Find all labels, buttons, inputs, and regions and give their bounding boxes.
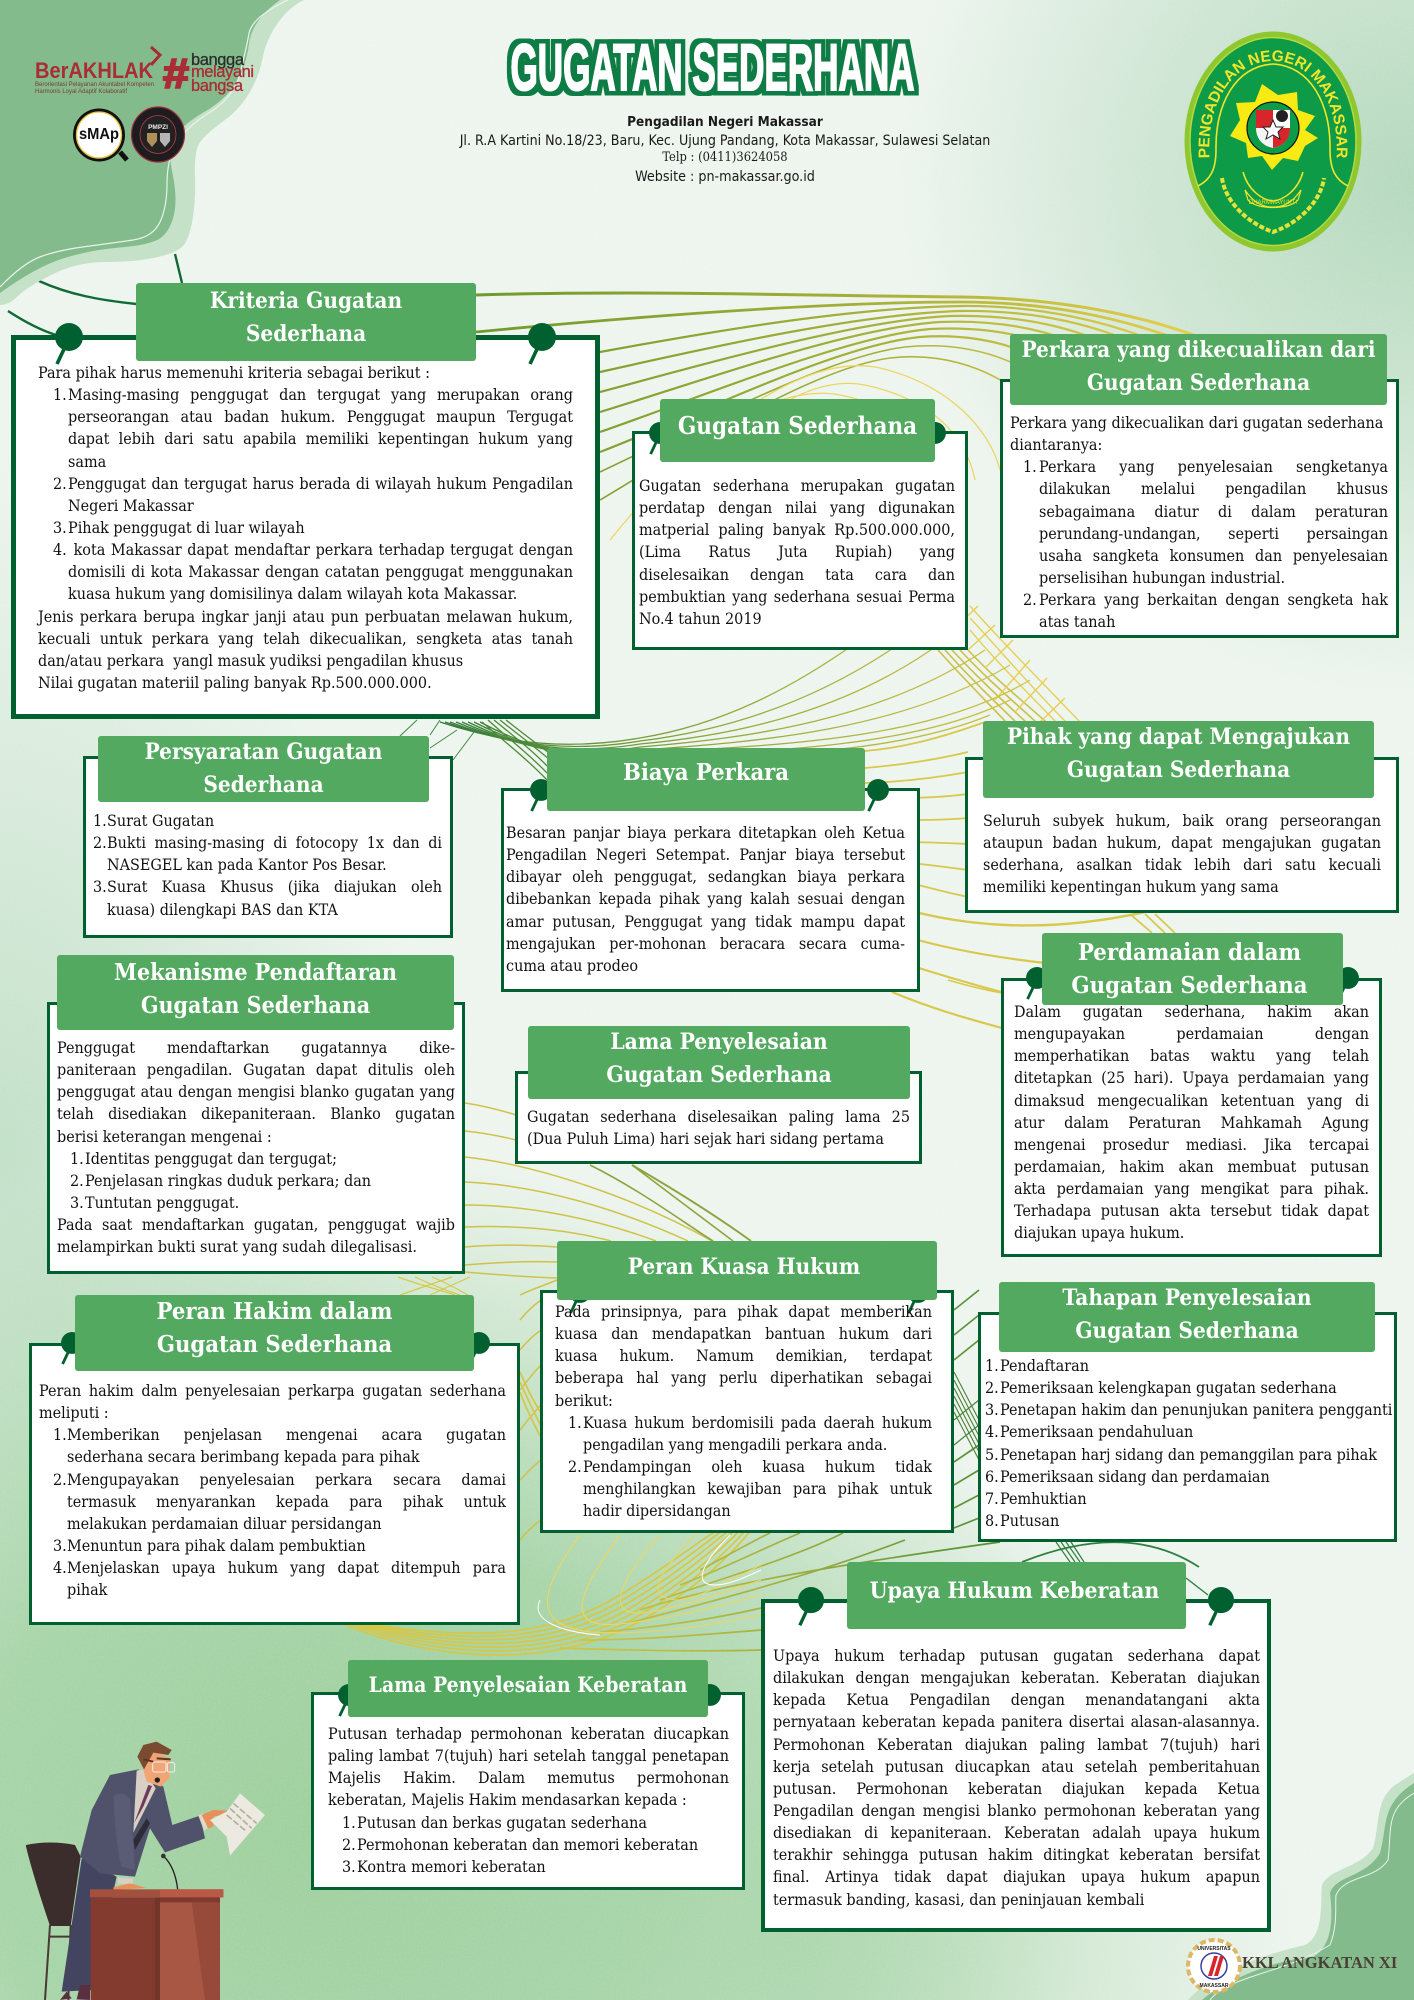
text: pengadilan yang mengadili perkara anda. xyxy=(583,1435,887,1454)
emblem: Pengadilan Negeri Makassar xyxy=(1184,32,1362,252)
panel: Persyaratan Gugatan Sederhana xyxy=(83,736,453,938)
text: dilakukan melalui pengadilan khusus xyxy=(1039,479,1388,498)
text: ataupun badan hukum, dapat mengajukan gugatan xyxy=(983,833,1381,852)
text: Pendaftaran xyxy=(1000,1356,1089,1375)
text: dilakukan dengan mengajukan keberatan. Keberatan diajukan xyxy=(773,1668,1260,1687)
text: 2. xyxy=(568,1457,582,1476)
heading: Kriteria Gugatan xyxy=(210,288,402,314)
text: dapat lebih dari satu apabila memiliki kepentingan hukum yang xyxy=(68,429,573,448)
heading xyxy=(983,721,1374,798)
text: paniteraan pengadilan. Gugatan dapat ditulis oleh xyxy=(57,1060,455,1079)
corner decoration top-left xyxy=(0,0,304,305)
text: termasuk banding, kasasi, dan peninjauan kembali xyxy=(773,1890,1144,1909)
logo: BerAKHLAK bangga melayani bangsa: Harmonis Loyal Adaptif Kolaboratif xyxy=(35,89,127,95)
panel: Biaya Perkara xyxy=(501,748,920,992)
heading xyxy=(136,283,476,361)
heading: Gugatan Sederhana xyxy=(1067,757,1290,783)
text: Kontra memori keberatan xyxy=(357,1857,546,1876)
panel: Perdamaian dalam Gugatan Sederhana xyxy=(1001,933,1382,1257)
label: KKL Angkatan XI: KKL ANGKATAN XI xyxy=(1242,1953,1397,1972)
text: Memberikan penjelasan mengenai acara gugatan xyxy=(67,1425,506,1444)
text: Pemeriksaan sidang dan perdamaian xyxy=(1000,1467,1270,1486)
text: Negeri Makassar xyxy=(68,496,194,515)
text: 2. xyxy=(53,1470,67,1489)
nested lower arcs xyxy=(548,1530,761,1633)
pin right xyxy=(935,422,946,444)
text: 7. xyxy=(985,1489,999,1508)
logo: BerAKHLAK bangga melayani bangsa: bangga xyxy=(191,51,245,69)
corner decoration bottom-right xyxy=(1188,1773,1414,2000)
text: (Dua Puluh Lima) hari sejak hari sidang pertama xyxy=(527,1129,884,1148)
text: NASEGEL kan pada Kantor Pos Besar. xyxy=(107,855,387,874)
text: Peran hakim dalm penyelesaian perkarpa gugatan sederhana xyxy=(39,1381,506,1400)
heading xyxy=(1010,334,1387,405)
panel: Peran Hakim xyxy=(29,1295,520,1625)
text: Pemeriksaan kelengkapan gugatan sederhana xyxy=(1000,1378,1337,1397)
text: paling lambat 7(tujuh) hari setelah tanggal penetapan xyxy=(328,1746,729,1765)
text xyxy=(506,823,905,975)
pin left xyxy=(570,1300,588,1314)
text: 2. xyxy=(53,474,67,493)
text: diantaranya: xyxy=(1010,435,1102,454)
text: 4. xyxy=(53,1558,67,1577)
text: memperhatikan batas waktu yang telah xyxy=(1014,1046,1369,1065)
text: Bukti masing-masing di fotocopy 1x dan di xyxy=(107,833,442,852)
text: Dalam gugatan sederhana, hakim akan xyxy=(1014,1002,1369,1021)
text: Perkara yang dikecualikan dari gugatan sederhana xyxy=(1010,413,1383,432)
text: 2. xyxy=(70,1171,84,1190)
text xyxy=(328,1723,729,1878)
logo: Universitas Dipa Makassar xyxy=(1186,1938,1242,1994)
text: 3. xyxy=(53,1536,67,1555)
text: sederhana secara berimbang kepada para pihak xyxy=(67,1447,420,1466)
text: meliputi : xyxy=(39,1403,109,1422)
text: penggugat atau dengan mengisi blanko gugatan yang xyxy=(57,1082,455,1101)
heading: Pihak yang dapat Mengajukan xyxy=(1007,724,1350,750)
text: 1. xyxy=(568,1413,582,1432)
text: 1. xyxy=(1023,457,1037,476)
text: Pemeriksaan pendahuluan xyxy=(1000,1422,1193,1441)
text: kota Makassar dapat mendaftar perkara terhadap tergugat dengan xyxy=(74,540,573,559)
text: pembuktian yang sederhana sesuai Perma xyxy=(639,587,955,606)
heading: Gugatan Sederhana xyxy=(141,992,370,1019)
text: pihak xyxy=(67,1580,107,1599)
text: Penjelasan ringkas duduk perkara; dan xyxy=(85,1171,371,1190)
text: matperial paling banyak Rp.500.000.000, xyxy=(639,520,955,539)
text: dimaksud mengecualikan ketentuan yang di xyxy=(1014,1091,1369,1110)
text: keberatan, Majelis Hakim mendasarkan kepada : xyxy=(328,1790,687,1809)
main lower ribbon xyxy=(345,1372,755,1655)
heading: Tahapan Penyelesaian xyxy=(1062,1285,1312,1311)
text: Menuntun para pihak dalam pembuktian xyxy=(67,1536,366,1555)
text: akta perdamaian yang mengikat para pihak. xyxy=(1014,1179,1369,1198)
text: Pada saat mendaftarkan gugatan, penggugat wajib xyxy=(57,1215,455,1234)
text: telah disediakan dikepaniteraan. Blanko gugatan xyxy=(57,1104,455,1123)
wide fan from pinch xyxy=(440,640,1030,760)
heading: Perkara yang dikecualikan dari xyxy=(1021,337,1376,363)
text: Jenis perkara berupa ingkar janji atau pun perbuatan melawan hukum, xyxy=(38,607,573,626)
text: mengenai prosedur mediasi. Jika tercapai xyxy=(1014,1135,1369,1154)
heading: Sederhana xyxy=(203,772,324,798)
text: Masing-masing penggugat dan tergugat yang merupakan orang xyxy=(68,385,573,404)
heading xyxy=(98,736,429,802)
heading: Lama Penyelesaian xyxy=(610,1029,828,1055)
logo: BerAKHLAK bangga melayani bangsa: melayani xyxy=(191,63,254,81)
text: putusan. Permohonan keberatan diajukan kepada Ketua xyxy=(773,1779,1260,1798)
text: kuasa dan mendapatkan bantuan hukum dari xyxy=(555,1324,932,1343)
panel: Upaya Hukum Keberatan xyxy=(761,1562,1271,1932)
panel: Lama Penyelesaian Keberatan xyxy=(311,1660,745,1890)
text: Besaran panjar biaya perkara ditetapkan oleh Ketua xyxy=(506,823,905,842)
text xyxy=(555,1302,932,1520)
pin left xyxy=(337,1684,361,1720)
text: Perkara yang berkaitan dengan sengketa hak xyxy=(1039,590,1388,609)
heading: Gugatan Sederhana xyxy=(1071,971,1308,999)
heading xyxy=(75,1295,474,1371)
text: perdatap dengan nilai yang digunakan xyxy=(639,498,955,517)
heading xyxy=(557,1241,937,1300)
text: Surat Gugatan xyxy=(107,811,214,830)
text: beberapa hal yang perlu diperhatikan sebagai xyxy=(555,1368,932,1387)
text: melakukan perdamaian diluar persidangan xyxy=(67,1514,382,1533)
pin left xyxy=(1026,967,1042,1000)
logo: SMAP xyxy=(73,108,129,162)
pin left xyxy=(55,323,83,365)
text: diselesaikan dengan tata cara dan xyxy=(639,565,955,584)
text: cuma atau prodeo xyxy=(506,956,638,975)
text xyxy=(773,1645,1260,1911)
text: Penetapan hakim dan penunjukan panitera pengganti xyxy=(1000,1400,1392,1419)
text: Majelis Hakim. Dalam memutus permohonan xyxy=(328,1768,729,1787)
logo: BerAKHLAK bangga melayani bangsa: # xyxy=(163,50,189,97)
text xyxy=(983,811,1381,896)
text: Putusan terhadap permohonan keberatan diucapkan xyxy=(328,1724,729,1743)
text: Surat Kuasa Khusus (jika diajukan oleh xyxy=(107,877,442,896)
text: Identitas penggugat dan tergugat; xyxy=(85,1149,337,1168)
rays to the right xyxy=(560,1290,1000,1651)
pin right xyxy=(908,1300,926,1314)
logo: BerAKHLAK bangga melayani bangsa xyxy=(35,46,254,97)
pin left xyxy=(530,779,547,812)
text: 4. xyxy=(985,1422,999,1441)
pin left xyxy=(649,422,660,455)
text: perselisihan hubungan industrial. xyxy=(1039,568,1285,587)
heading: Sederhana xyxy=(246,321,366,347)
emblem: Pengadilan Negeri Makassar: PENGADILAN NEGERI MAKASSAR xyxy=(1198,50,1348,158)
pin right xyxy=(698,1684,722,1720)
text xyxy=(93,811,442,919)
text xyxy=(39,1380,506,1601)
text: dan/atau perkara yangl masuk yudiksi pengadilan khusus xyxy=(38,651,463,670)
text: dibebankan kepada pihak yang kalah sesuai dengan xyxy=(506,889,905,908)
heading: Peran Hakim dalam xyxy=(157,1297,392,1325)
text xyxy=(57,1038,455,1256)
green strokes near Upaya xyxy=(1022,1542,1208,1595)
text xyxy=(1010,413,1388,631)
panel: Perkara yang dikecualikan xyxy=(1000,334,1399,638)
text: 1. xyxy=(342,1813,356,1832)
text: sederhana, asalkan tidak lebih dari satu kecuali xyxy=(983,855,1381,874)
text: No.4 tahun 2019 xyxy=(639,609,762,628)
text: 2. xyxy=(985,1378,999,1397)
court address block: Website : pn-makassar.go.id xyxy=(635,169,815,185)
text: Penggugat mendaftarkan gugatannya dike- xyxy=(57,1038,455,1057)
text: perundang-undangan, seperti persaingan xyxy=(1039,524,1388,543)
text: Tuntutan penggugat. xyxy=(85,1193,239,1212)
heading: Lama Penyelesaian Keberatan xyxy=(369,1672,687,1697)
lower-mid fan xyxy=(465,1103,712,1540)
heading xyxy=(348,1660,708,1717)
text: Pengadilan Negeri Setempat. Panjar biaya tersebut xyxy=(506,845,905,864)
text: Penggugat dan tergugat harus berada di wilayah hukum Pengadilan xyxy=(68,474,573,493)
text: 1. xyxy=(70,1149,84,1168)
text: ditetapkan (25 hari). Upaya perdamaian yang xyxy=(1014,1068,1369,1087)
heading: Mekanisme Pendaftaran xyxy=(114,959,397,986)
heading: Gugatan Sederhana xyxy=(157,1330,392,1358)
text: Gugatan sederhana diselesaikan paling lama 25 xyxy=(527,1107,910,1126)
court address block xyxy=(459,114,990,185)
text: 2. xyxy=(342,1835,356,1854)
heading: Gugatan Sederhana xyxy=(606,1062,832,1088)
heading: Peran Kuasa Hukum xyxy=(628,1254,860,1280)
text: Putusan xyxy=(1000,1511,1059,1530)
text: menghilangkan kewajiban para pihak untuk xyxy=(583,1479,932,1498)
logo: PMPZI: PMPZI xyxy=(148,124,168,131)
text xyxy=(639,476,955,628)
text: Pemhuktian xyxy=(1000,1489,1087,1508)
text: kepada Ketua Pengadilan dengan menandatangani akta xyxy=(773,1690,1260,1709)
text xyxy=(527,1107,910,1148)
panel: Pihak yang dapat Mengajukan xyxy=(965,721,1399,913)
text: diajukan upaya hukum. xyxy=(1014,1223,1184,1242)
text: 1. xyxy=(985,1356,999,1375)
text: memiliki kepentingan hukum yang sama xyxy=(983,877,1279,896)
text: berisi keterangan mengenai : xyxy=(57,1127,272,1146)
pin right xyxy=(467,1332,491,1368)
text: 2. xyxy=(1023,590,1037,609)
text: perdamaian, hakim akan membuat putusan xyxy=(1014,1157,1369,1176)
panel: Peran Kuasa Hukum xyxy=(540,1241,954,1533)
logo: SMAP: sMAp xyxy=(79,126,119,143)
logo: BerAKHLAK bangga melayani bangsa: Berorientasi Pelayanan Akuntabel Kompeten xyxy=(35,82,154,88)
logo: BerAKHLAK bangga melayani bangsa: BerAKHLAK xyxy=(35,58,154,83)
text xyxy=(1014,1002,1369,1242)
heading: Gugatan Sederhana xyxy=(1075,1318,1299,1344)
text: usaha sangketa konsumen dan penyelesaian xyxy=(1039,546,1388,565)
text: mengupayakan perdamaian dengan xyxy=(1014,1024,1369,1043)
emblem: Pengadilan Negeri Makassar: DHARMMAYUKTI xyxy=(1249,200,1297,206)
heading xyxy=(528,1026,910,1099)
text: Putusan dan berkas gugatan sederhana xyxy=(357,1813,647,1832)
court address block: Telp : (0411)3624058 xyxy=(662,150,788,165)
court address block: Pengadilan Negeri Makassar xyxy=(627,114,823,130)
text: 3. xyxy=(93,877,107,896)
heading xyxy=(57,955,454,1030)
heading: Perdamaian dalam xyxy=(1078,938,1301,966)
pin right xyxy=(528,323,556,365)
panel: Tahapan Penyelesaian xyxy=(978,1282,1397,1542)
heading: Persyaratan Gugatan xyxy=(145,739,382,765)
text: sebagaimana diatur di dalam peraturan xyxy=(1039,502,1388,521)
heading: Upaya Hukum Keberatan xyxy=(870,1578,1159,1604)
logo: Universitas Dipa Makassar: UNIVERSITAS xyxy=(1197,1946,1231,1952)
text: 8. xyxy=(985,1511,999,1530)
text: 5. xyxy=(985,1445,999,1464)
text: (Lima Ratus Juta Rupiah) yang xyxy=(639,542,955,561)
logo: PMPZI xyxy=(130,106,186,163)
text: pernyataan keberatan kepada panitera disertai alasan-alasannya. xyxy=(773,1712,1260,1731)
text: Pengadilan dengan mengisi blanko permohonan keberatan yang xyxy=(773,1801,1260,1820)
text: atur dalam Peraturan Mahkamah Agung xyxy=(1014,1113,1369,1132)
text: Permohonan Keberatan diajukan paling lambat 7(tujuh) hari xyxy=(773,1735,1260,1754)
text: disediakan di kepaniteraan. Keberatan adalah upaya hukum xyxy=(773,1823,1260,1842)
text: terakhir sehingga putusan hakim ditingkat keberatan bersifat xyxy=(773,1845,1260,1864)
text: 3. xyxy=(342,1857,356,1876)
pinch to Biaya bundle xyxy=(482,720,552,780)
nested arcs xyxy=(610,366,1000,560)
logo: Universitas Dipa Makassar: MAKASSAR xyxy=(1200,1983,1229,1989)
text: Gugatan sederhana merupakan gugatan xyxy=(639,476,955,495)
text: kecuali untuk perkara yang telah dikecualikan, sengketa atas tanah xyxy=(38,629,573,648)
text: 1. xyxy=(53,1425,67,1444)
pin right xyxy=(1343,967,1359,993)
heading: Gugatan Sederhana xyxy=(678,411,917,440)
panel: Gugatan Sederhana xyxy=(632,399,968,650)
heading xyxy=(547,748,865,811)
heading: Biaya Perkara xyxy=(623,758,789,786)
heading xyxy=(660,399,935,462)
right bundle xyxy=(938,650,1046,722)
text xyxy=(36,363,573,692)
text: berikut: xyxy=(555,1391,613,1410)
panel: Mekanisme Pendaftaran xyxy=(47,955,465,1274)
text: perseorangan atau badan hukum. Penggugat maupun Tergugat xyxy=(68,407,573,426)
text: Pada prinsipnya, para pihak dapat memberikan xyxy=(555,1302,932,1321)
text: amar putusan, Penggugat yang tidak mampu dapat xyxy=(506,912,905,931)
text: kerja setelah putusan diucapkan atau setelah pemberitahuan xyxy=(773,1757,1260,1776)
heading xyxy=(999,1282,1375,1352)
text: Mengupayakan penyelesaian perkara secara damai xyxy=(67,1470,506,1489)
logo: BerAKHLAK bangga melayani bangsa: bangsa xyxy=(191,77,244,95)
text: 1. xyxy=(53,385,67,404)
text: Pendampingan oleh kuasa hukum tidak xyxy=(583,1457,932,1476)
text: Kuasa hukum berdomisili pada daerah hukum xyxy=(583,1413,932,1432)
text: 6. xyxy=(985,1467,999,1486)
text: Permohonan keberatan dan memori keberatan xyxy=(357,1835,698,1854)
text: Menjelaskan upaya hukum yang dapat ditempuh para xyxy=(67,1558,506,1577)
right side fan lines xyxy=(865,722,1175,1028)
text: Upaya hukum terhadap putusan gugatan sederhana dapat xyxy=(773,1646,1260,1665)
text: kuasa hukum yang domisilinya dalam wilayah kota Makassar. xyxy=(68,584,517,603)
text: Perkara yang penyelesaian sengketanya xyxy=(1039,457,1388,476)
text: 1. xyxy=(93,811,107,830)
text: Para pihak harus memenuhi kriteria sebagai berikut : xyxy=(38,363,430,382)
text: domisili di kota Makassar dengan catatan penggugat menggunakan xyxy=(68,562,573,581)
text: Nilai gugatan materiil paling banyak Rp.500.000.000. xyxy=(38,673,432,692)
illustration: man speaking at podium xyxy=(20,1735,270,2000)
text: atas tanah xyxy=(1039,612,1115,631)
text: dibayar oleh penggugat, sedangkan biaya perkara xyxy=(506,867,905,886)
text: Terhadapa putusan akta tersebut tidak dapat xyxy=(1014,1201,1369,1220)
panel: Kriteria Gugatan Sederhana xyxy=(11,283,600,719)
heading: Gugatan Sederhana xyxy=(1087,370,1310,396)
text: 2. xyxy=(93,833,107,852)
text: sama xyxy=(68,452,106,471)
pin right xyxy=(867,779,889,812)
panel: Lama Penyelesaian xyxy=(515,1026,922,1164)
pin left xyxy=(60,1332,84,1368)
text: Penetapan harj sidang dan pemanggilan para pihak xyxy=(1000,1445,1377,1464)
text: final. Artinya tidak dapat diajukan upaya hukum apapun xyxy=(773,1867,1260,1886)
text: termasuk menyarankan kepada para pihak untuk xyxy=(67,1492,506,1511)
text: mengajukan per-mohonan beracara secara cuma- xyxy=(506,934,905,953)
text: Pihak penggugat di luar wilayah xyxy=(68,518,305,537)
text: 4. xyxy=(53,540,67,559)
heading xyxy=(847,1562,1186,1629)
text: kuasa hukum. Namum demikian, terdapat xyxy=(555,1346,932,1365)
heading xyxy=(1042,933,1343,1005)
court address block: Jl. R.A Kartini No.18/23, Baru, Kec. Ujung Pandang, Kota Makassar, Sulawesi Selatan xyxy=(460,133,990,149)
text: 3. xyxy=(985,1400,999,1419)
text: Seluruh subyek hukum, baik orang perseorangan xyxy=(983,811,1381,830)
text: melampirkan bukti surat yang sudah dilegalisasi. xyxy=(57,1237,417,1256)
text: kuasa) dilengkapi BAS dan KTA xyxy=(107,900,338,919)
top fan xyxy=(476,293,1196,500)
text: 3. xyxy=(53,518,67,537)
pin left xyxy=(797,1587,825,1630)
text: hadir dipersidangan xyxy=(583,1501,731,1520)
text xyxy=(985,1356,1392,1530)
text: 3. xyxy=(70,1193,84,1212)
pin right xyxy=(1207,1587,1235,1630)
